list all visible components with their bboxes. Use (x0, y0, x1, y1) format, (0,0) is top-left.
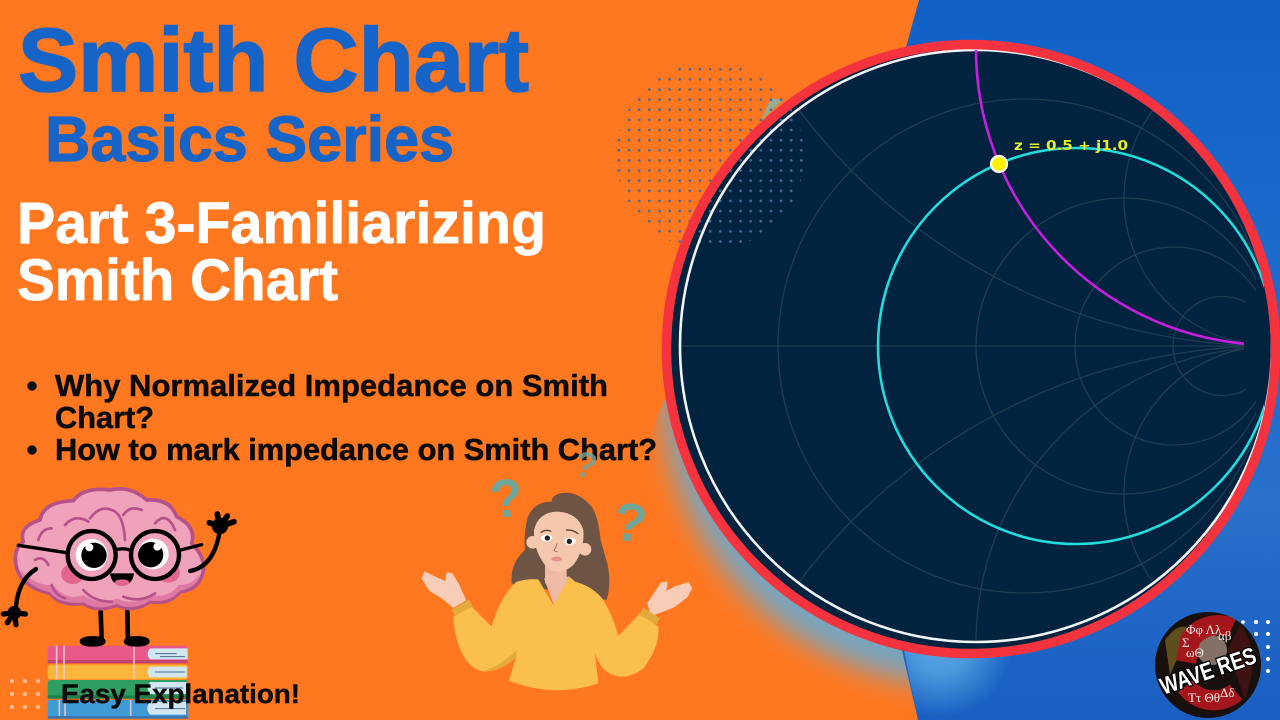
hand left (423, 573, 465, 607)
logo greek letters: Σ (1182, 635, 1190, 650)
bullet list: Chart? (55, 400, 154, 435)
cyan resistance circle r=0.5 (878, 148, 1274, 544)
glow behind chart (646, 400, 914, 702)
heading: part 3: Part 3-Familiarizing (17, 191, 546, 256)
face (534, 512, 584, 572)
question marks: ? (487, 467, 526, 530)
logo swirl (1165, 625, 1252, 700)
halftone dots (617, 68, 803, 244)
question marks (487, 442, 651, 555)
facial features (541, 530, 578, 561)
brain body (15, 489, 204, 609)
logo greek letters: ωΘ (1186, 645, 1204, 660)
hair back (511, 493, 609, 600)
red outer ring (666, 44, 1276, 654)
glasses and eyes (18, 531, 202, 579)
bullet list: Why Normalized Impedance on Smith (55, 368, 608, 403)
logo greek letters: Δδ (1220, 685, 1234, 700)
logo greek letters (1182, 622, 1234, 705)
chart disc (669, 47, 1273, 651)
outer white circle (680, 50, 1272, 642)
illustration: brain character (3, 489, 234, 644)
brain legs (82, 612, 147, 644)
logo greek letters: αβ (1218, 628, 1232, 643)
brain arms and hands (3, 514, 234, 625)
sweater collar (544, 576, 569, 605)
brain mouth (110, 573, 134, 586)
label: easy explanation: Easy Explanation! (61, 679, 300, 709)
decorative dot grid lower left (10, 679, 40, 709)
background: blue panel (850, 0, 1280, 720)
brain lower shading (20, 570, 200, 607)
marked impedance point (991, 156, 1007, 172)
ears (526, 536, 591, 556)
magenta reactance arc x=1 (976, 50, 1244, 344)
subtitle: Basics Series: Basics Series (45, 103, 454, 175)
cuffs (452, 599, 660, 624)
sleeve shadow (482, 650, 517, 672)
bullet list (28, 368, 657, 467)
question marks: ? (570, 442, 602, 487)
bullet list: How to mark impedance on Smith Chart? (55, 432, 657, 467)
smith chart (612, 44, 1276, 654)
illustration: confused girl (423, 493, 691, 690)
chart grid (680, 99, 1273, 642)
logo greek letters: Φφ Λλ (1186, 622, 1222, 637)
sweater (453, 577, 658, 690)
decorative dots beside logo (1241, 620, 1270, 673)
illustration: stack of books (48, 646, 188, 719)
question marks: ? (610, 491, 651, 555)
logo: wave res (1155, 612, 1261, 718)
neck (545, 563, 567, 583)
point label: z = 0.5 + j1.0 (1014, 138, 1128, 154)
brain cheeks (61, 564, 84, 584)
brain folds (35, 508, 175, 602)
logo greek letters: Ττ Θθ (1188, 690, 1220, 705)
logo wordmark: WAVE RES (1156, 642, 1260, 701)
hand right (648, 583, 691, 615)
small teal triangle accent (761, 98, 783, 121)
title: Smith Chart: Smith Chart (18, 11, 529, 111)
heading: part 3 (17, 191, 546, 313)
heading: part 3: Smith Chart (17, 248, 338, 313)
